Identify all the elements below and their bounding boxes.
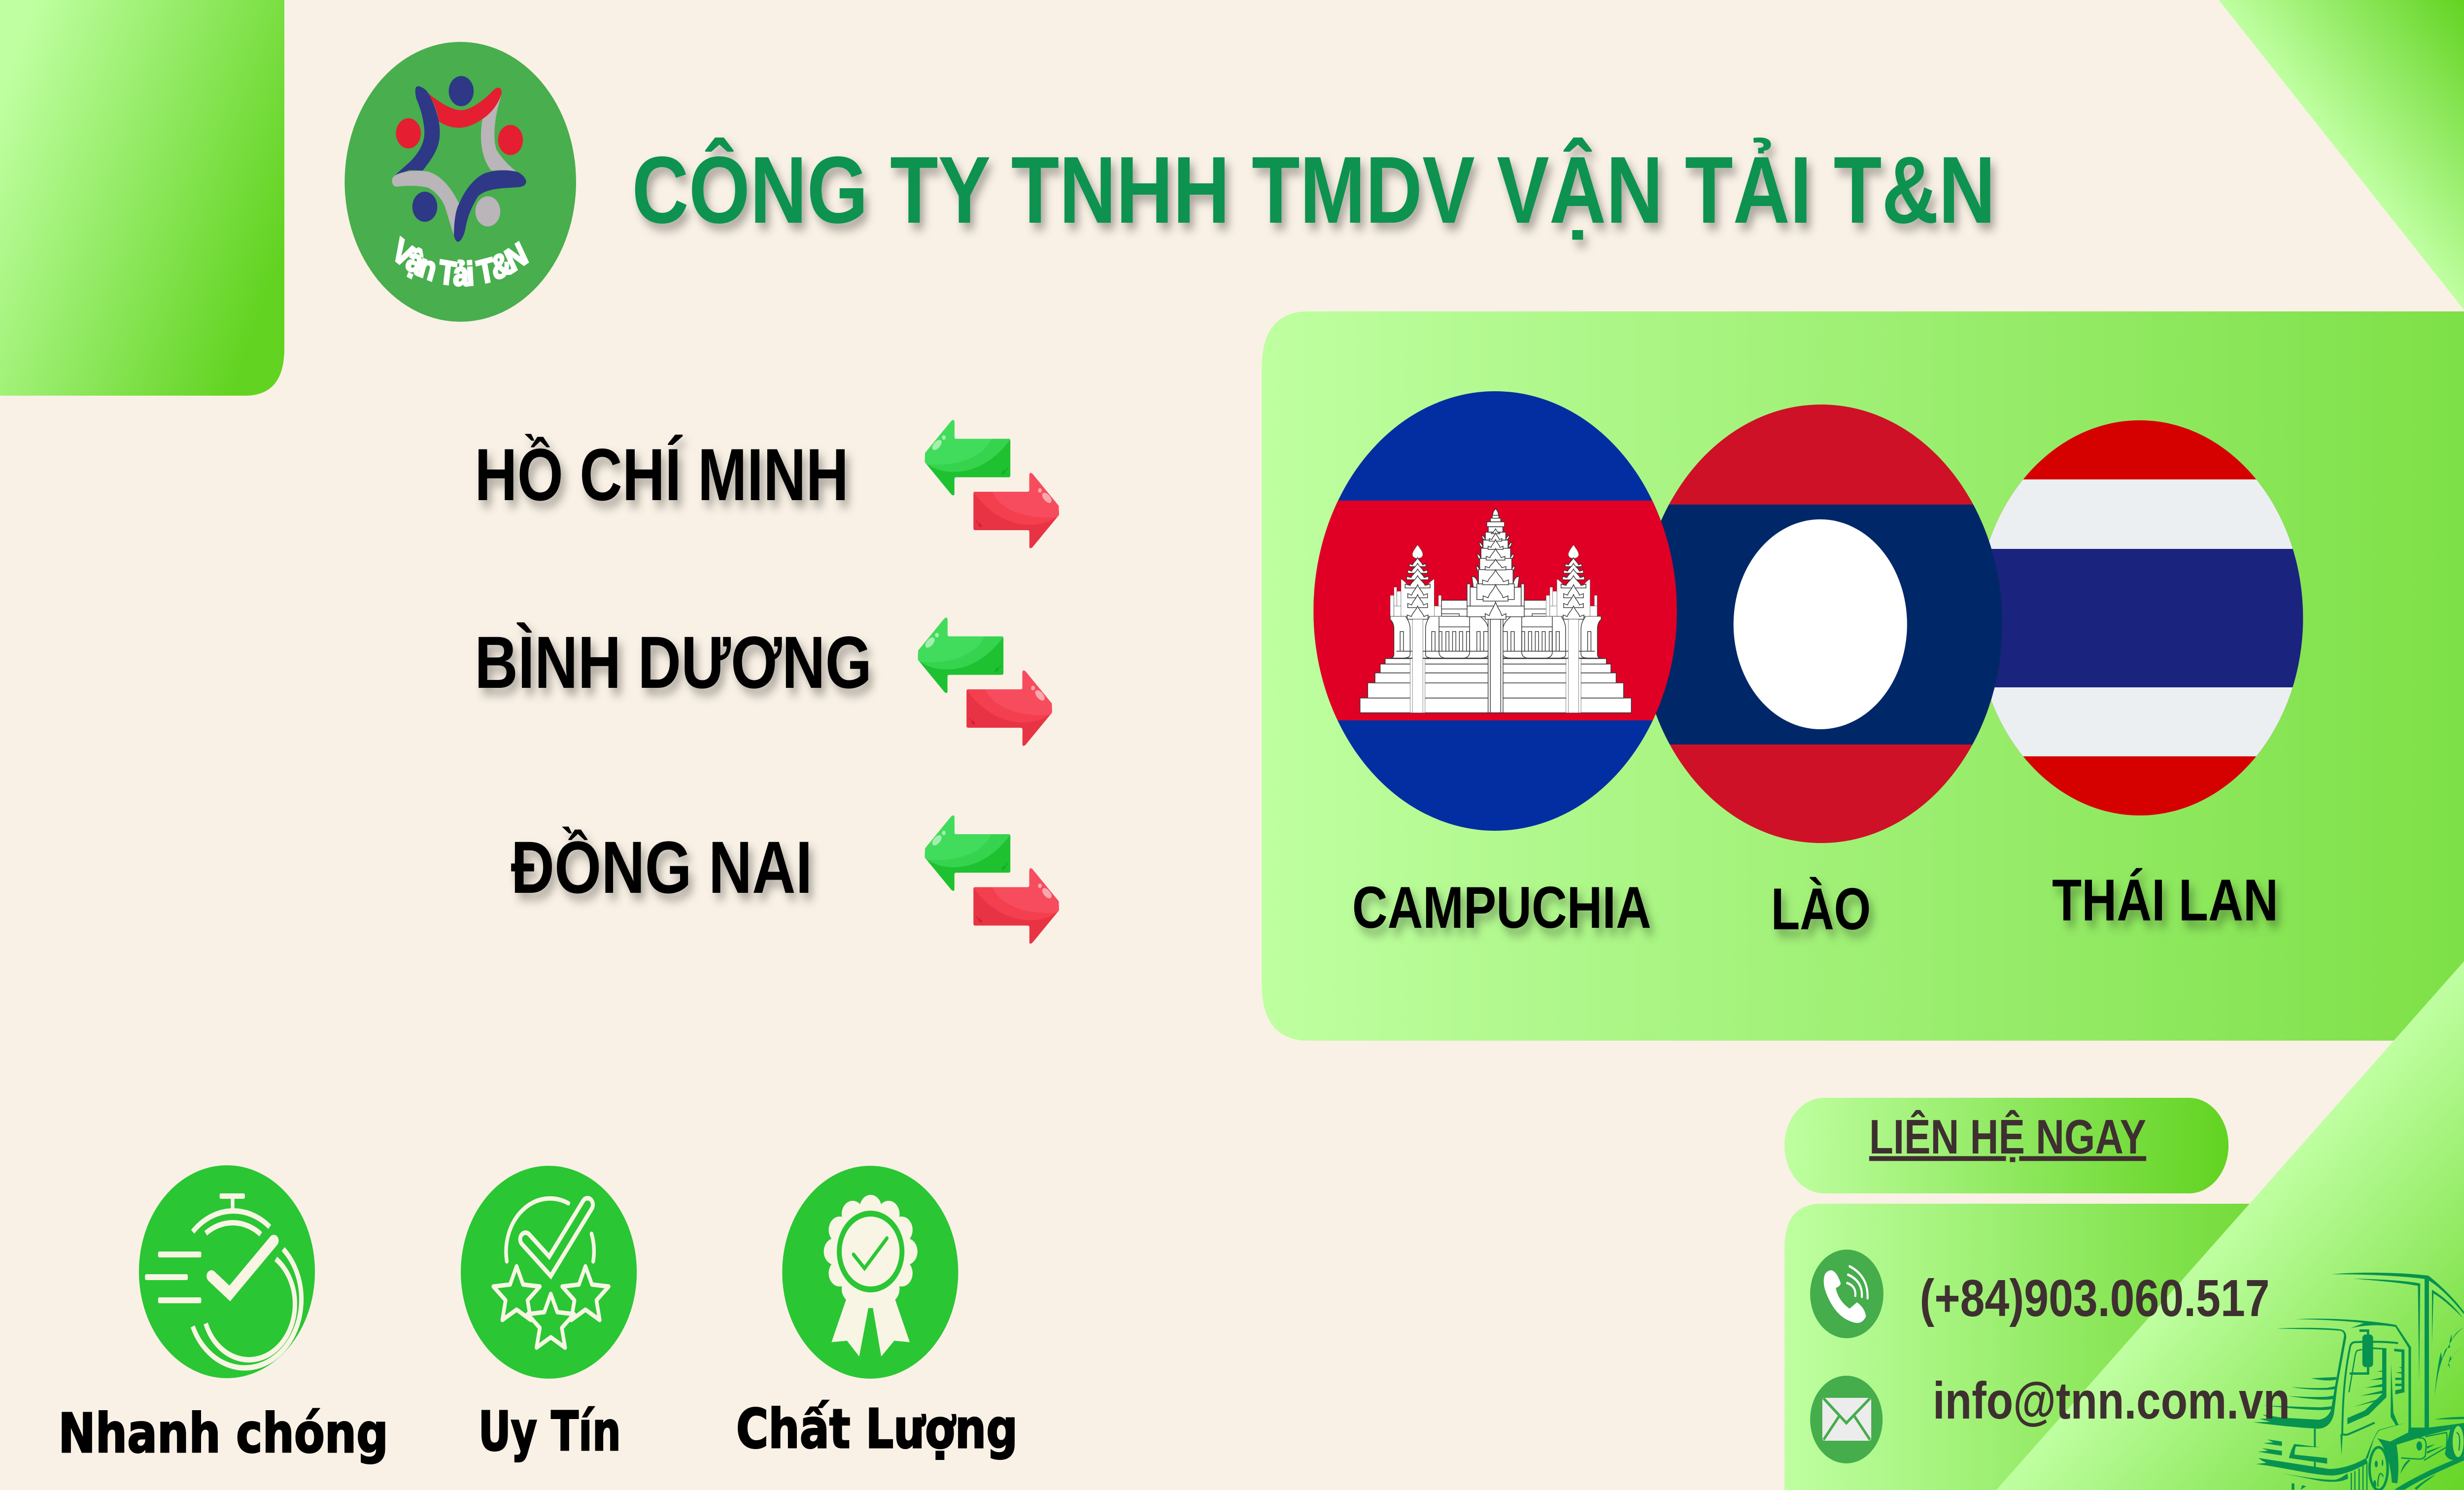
label: Thái Lan: THÁI LAN [2052,867,2278,933]
email address: info@tnn.com.vn [1933,1371,2290,1430]
arrows: Hồ Chí Minh [924,417,1061,548]
logo [344,42,576,322]
flag: Cambodia [1313,391,1677,831]
icon: stopwatch with check [139,1165,315,1378]
panel: contact background [1784,1204,2322,1490]
route: Hồ Chí Minh: HỒ CHÍ MINH [475,434,849,516]
truck illustration [2253,1273,2464,1490]
feature: Uy Tín [461,1166,637,1463]
Angkor Wat emblem [1360,508,1631,713]
feature: Chất Lượng [736,1166,1018,1460]
label: Campuchia: CAMPUCHIA [1352,875,1651,941]
contact: phone [1810,1250,2270,1338]
contact: email [1810,1371,2290,1463]
central tower [1467,508,1524,619]
icon: award rosette [782,1166,958,1379]
arrows: Bình Dương [917,615,1054,746]
route: Đồng Nai: ĐỒNG NAI [511,826,812,909]
phone number: (+84)903.060.517 [1920,1269,2270,1327]
icon: phone [1810,1250,1883,1338]
flag: Laos [1640,405,2002,843]
route: Bình Dương: BÌNH DƯƠNG [475,621,872,704]
label: Nhanh chóng [58,1402,388,1465]
button: Liên hệ ngay [1784,1098,2228,1193]
title: CÔNG TY TNHH TMDV VẬN TẢI T&N [632,137,1995,243]
arrows: Đồng Nai [924,813,1061,944]
decorative corner: top right [2219,0,2464,310]
button label: LIÊN HỆ NGAY [1869,1110,2146,1164]
feature: Nhanh chóng [58,1165,388,1465]
label: Uy Tín [479,1400,621,1463]
decorative corner: top left [0,0,284,396]
flag: Thailand [1976,420,2303,815]
label: Lào: LÀO [1771,876,1871,942]
decorative corner: bottom right [1996,961,2464,1490]
label: Chất Lượng [736,1397,1018,1460]
logo wordmark: Vận Tải T&N [395,236,529,287]
icon: check with three stars [461,1166,637,1379]
icon: envelope [1810,1376,1882,1463]
panel: international destinations [1262,311,2464,1041]
